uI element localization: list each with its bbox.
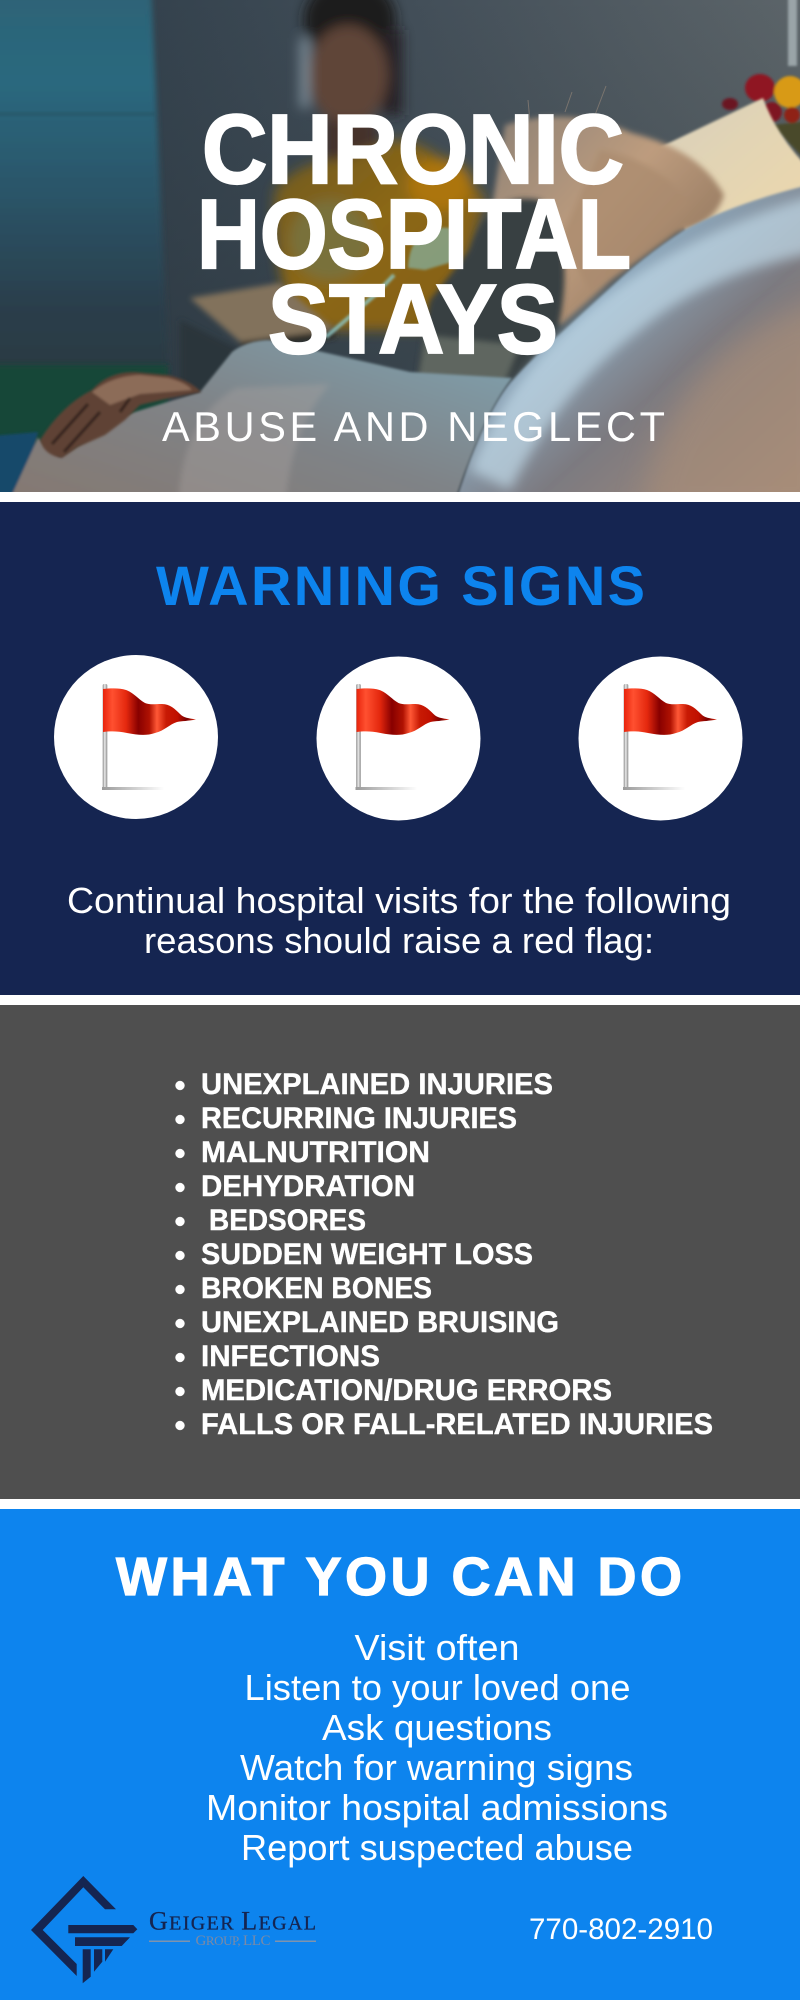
- bulleted list: SUDDEN WEIGHT LOSS: [201, 1238, 533, 1271]
- bulleted list: INFECTIONS: [201, 1340, 380, 1373]
- panel: warning sign list: [0, 1005, 800, 1499]
- action list: [206, 1627, 668, 1868]
- bulleted list: MALNUTRITION: [201, 1136, 430, 1169]
- subtitle: ABUSE AND NEGLECT: [162, 403, 665, 450]
- heading: warning signs: WARNING SIGNS: [156, 554, 645, 617]
- bulleted list: BROKEN BONES: [201, 1272, 432, 1305]
- action list: Visit often: [354, 1627, 520, 1668]
- warning signs text: Continual hospital visits for the following: [67, 880, 731, 921]
- action list: Ask questions: [322, 1707, 552, 1748]
- phone number: 770-802-2910: [529, 1913, 713, 1946]
- patient hand: [40, 372, 201, 458]
- icon: red flag 1: [54, 655, 218, 819]
- title: [202, 113, 630, 356]
- cream pillow: [662, 96, 800, 230]
- icon: red flag 3: [578, 656, 742, 820]
- action list: Watch for warning signs: [240, 1747, 633, 1788]
- hair and face: [490, 117, 724, 325]
- warning signs text: [67, 880, 731, 961]
- oxygen mask and tube: [326, 228, 452, 337]
- action list: Listen to your loved one: [244, 1667, 630, 1708]
- nurse: [274, 0, 485, 330]
- title: STAYS: [268, 264, 558, 374]
- bulleted list: BEDSORES: [209, 1204, 366, 1237]
- bulleted list: UNEXPLAINED INJURIES: [201, 1068, 553, 1101]
- title: HOSPITAL: [197, 179, 631, 289]
- heading: what you can do: WHAT YOU CAN DO: [116, 1547, 682, 1607]
- action list: Report suspected abuse: [241, 1827, 633, 1868]
- bulleted list: UNEXPLAINED BRUISING: [201, 1306, 559, 1339]
- flowers and drip: [722, 0, 800, 175]
- bulleted list: FALLS OR FALL-RELATED INJURIES: [201, 1408, 713, 1441]
- patient gown: [0, 338, 512, 492]
- large pillow: [458, 186, 800, 492]
- bulleted list: RECURRING INJURIES: [201, 1102, 517, 1135]
- logo: Geiger Legal Group: [31, 1876, 316, 1983]
- bulleted list: DEHYDRATION: [201, 1170, 415, 1203]
- warning signs text: reasons should raise a red flag:: [144, 920, 654, 961]
- icon: diamond and column: [31, 1876, 137, 1983]
- panel: warning signs: [0, 502, 800, 995]
- book: [181, 280, 337, 390]
- logo tagline: GROUP, LLC: [196, 1933, 270, 1949]
- bulleted list: MEDICATION/DRUG ERRORS: [201, 1374, 612, 1407]
- icon: red flag 2: [316, 656, 480, 820]
- panel: what you can do: [0, 1509, 800, 2000]
- title: CHRONIC: [202, 94, 624, 204]
- logo wordmark: GEIGER LEGAL: [149, 1906, 316, 1935]
- bulleted list: [176, 1068, 713, 1441]
- photo banner: patient and nurse in hospital room: [0, 0, 800, 520]
- action list: Monitor hospital admissions: [206, 1787, 668, 1828]
